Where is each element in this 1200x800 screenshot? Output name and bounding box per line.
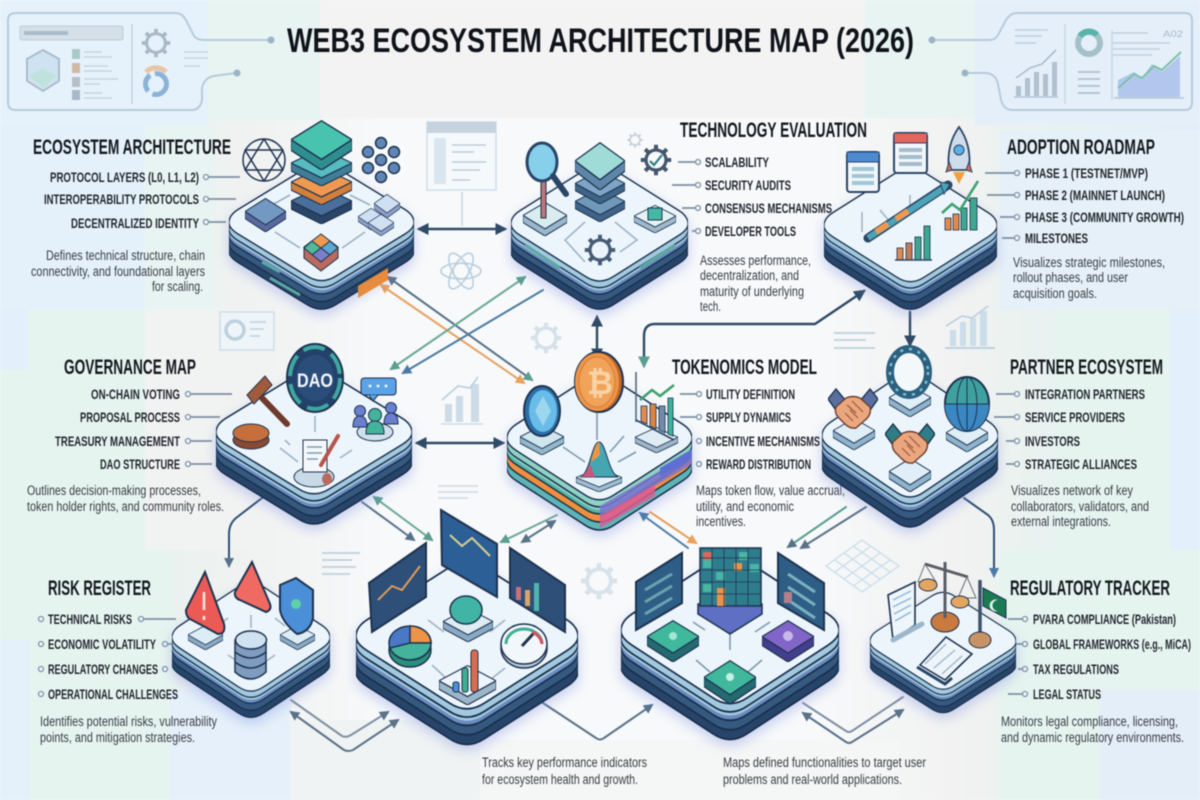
description [31, 248, 205, 294]
item list: ON-CHAIN VOTING [91, 386, 180, 402]
icon: DAO badge [287, 344, 343, 412]
item list: SUPPLY DYNAMICS [706, 409, 791, 425]
icon: heat map [698, 548, 762, 634]
panel: risk register [38, 562, 330, 745]
item list [994, 386, 1145, 472]
icon: ring network [890, 349, 928, 395]
heading: TOKENOMICS MODEL [672, 356, 817, 379]
description: Outlines decision-making processes, [27, 483, 201, 498]
description: connectivity, and foundational layers [31, 264, 205, 279]
description: incentives. [696, 514, 746, 529]
icon: ethereum coin [520, 386, 564, 455]
description: Identifies potential risks, vulnerability [40, 714, 217, 729]
item list: MILESTONES [1025, 230, 1088, 246]
description: rollout phases, and user [1013, 270, 1128, 285]
item list: PHASE 1 (TESTNET/MVP) [1025, 165, 1148, 181]
icon: bitcoin coin: ₿ [587, 365, 613, 401]
item list [672, 154, 832, 239]
item list: SERVICE PROVIDERS [1025, 409, 1125, 425]
connector arrows [229, 229, 994, 751]
icon: mini bars [453, 650, 478, 692]
panel: adoption roadmap [824, 127, 1184, 309]
item list: SECURITY AUDITS [705, 177, 791, 193]
description [700, 253, 811, 314]
description: tech. [700, 299, 721, 314]
panel: partner ecosystem [822, 349, 1163, 529]
description: collaborators, validators, and [1011, 499, 1149, 514]
panel: KPI dashboard [356, 510, 647, 787]
title: WEB3 ECOSYSTEM ARCHITECTURE MAP (2026) [287, 22, 914, 60]
item list: TREASURY MANAGEMENT [55, 433, 180, 449]
icon: DAO badge: DAO [297, 371, 333, 392]
item list [44, 169, 240, 231]
platform illustration [621, 548, 839, 739]
description: Visualizes strategic milestones, [1013, 255, 1165, 270]
panel: top-right faded dashboard [928, 13, 1192, 110]
item list: LEGAL STATUS [1033, 686, 1101, 702]
item list: REWARD DISTRIBUTION [706, 456, 811, 472]
item list: REGULATORY CHANGES [48, 661, 158, 677]
platform illustration [229, 121, 414, 309]
platform illustration [824, 127, 997, 309]
item list: CONSENSUS MECHANISMS [705, 200, 832, 216]
platform illustration [172, 562, 330, 717]
icon: pie chart [389, 626, 431, 667]
description: Tracks key performance indicators [482, 755, 647, 770]
icon: handshake left [828, 389, 878, 428]
description [27, 483, 224, 514]
description [1013, 255, 1165, 301]
panel: feature mapping [621, 548, 926, 787]
heading: ECOSYSTEM ARCHITECTURE [33, 136, 231, 159]
item list [680, 386, 820, 472]
platform illustration [507, 352, 692, 530]
item list: TAX REGULATIONS [1033, 661, 1119, 677]
icon: bell curve [576, 442, 622, 492]
item list: OPERATIONAL CHALLENGES [48, 686, 178, 702]
description: Assesses performance, [700, 253, 811, 268]
description: decentralization, and [700, 268, 799, 283]
description: for scaling. [152, 279, 203, 294]
heading: GOVERNANCE MAP [64, 356, 196, 379]
description: Maps defined functionalities to target user [723, 755, 926, 770]
description: problems and real-world applications. [723, 772, 902, 787]
icon: token chart [635, 372, 678, 453]
icon: rocket [946, 127, 972, 184]
icon: scroll document [888, 582, 922, 640]
platform illustration [822, 349, 998, 527]
icon: chart screens [369, 510, 565, 632]
item list: SCALABILITY [705, 154, 769, 170]
heading: RISK REGISTER [48, 577, 151, 600]
description [482, 755, 647, 787]
description: utility, and economic [696, 499, 794, 514]
panel: tokenomics model [507, 352, 845, 530]
icon: globe [945, 377, 989, 431]
platform illustration [216, 344, 412, 524]
description: for ecosystem health and growth. [482, 772, 638, 787]
description [1001, 714, 1184, 745]
item list: INCENTIVE MECHANISMS [706, 433, 820, 449]
platform illustration [356, 510, 578, 744]
description: Visualizes network of key [1011, 483, 1133, 498]
item list: DAO STRUCTURE [100, 456, 180, 472]
item list: INVESTORS [1025, 433, 1080, 449]
panel: governance map [27, 344, 412, 524]
panel: regulatory tracker [870, 562, 1191, 745]
item list: STRATEGIC ALLIANCES [1025, 456, 1137, 472]
platform illustration [511, 132, 688, 309]
icon: shield [280, 578, 313, 634]
icon: gavel [233, 376, 287, 449]
icon: warning triangles [186, 562, 270, 634]
description [1011, 483, 1149, 529]
item list: DEVELOPER TOOLS [705, 223, 796, 239]
icon: bitcoin coin [575, 352, 623, 412]
item list: PROPOSAL PROCESS [80, 409, 180, 425]
description: acquisition goals. [1013, 286, 1097, 301]
description: Maps token flow, value accrual, [696, 483, 845, 498]
item list [985, 165, 1184, 246]
item list: ECONOMIC VOLATILITY [48, 636, 156, 652]
description [40, 714, 217, 745]
item list: TECHNICAL RISKS [48, 611, 132, 627]
icon: scales of justice [918, 562, 976, 632]
icon: proposal document [294, 436, 338, 487]
item list [55, 386, 232, 472]
icon: side screens [636, 553, 824, 630]
panel: top-left faded dashboard [8, 13, 274, 110]
item list: UTILITY DEFINITION [706, 386, 795, 402]
description: points, and mitigation strategies. [40, 730, 195, 745]
description [696, 483, 845, 529]
panel: ecosystem architecture [31, 121, 414, 309]
description: token holder rights, and community roles. [27, 499, 224, 514]
heading: TECHNOLOGY EVALUATION [680, 119, 867, 142]
faded background icons [220, 122, 995, 599]
item list: PROTOCOL LAYERS (L0, L1, L2) [50, 169, 199, 185]
description: external integrations. [1011, 514, 1111, 529]
icon: flag [969, 580, 1006, 648]
description [723, 755, 926, 787]
item list: INTEGRATION PARTNERS [1025, 386, 1145, 402]
item list: DECENTRALIZED IDENTITY [71, 215, 199, 231]
icon: database [235, 631, 266, 679]
icon: laptop [917, 637, 972, 684]
icon: handshake center [885, 424, 935, 463]
item list [1008, 611, 1191, 702]
panel: top-right faded dashboard: A02 [1163, 29, 1183, 39]
description: Defines technical structure, chain [46, 248, 205, 263]
description: maturity of underlying [700, 284, 804, 299]
item list: INTEROPERABILITY PROTOCOLS [44, 191, 199, 207]
platform illustration [870, 562, 1016, 713]
icon: chat and people [353, 378, 398, 441]
item list [38, 611, 178, 702]
panel: technology evaluation [511, 119, 867, 314]
icon: gauge [501, 624, 547, 668]
